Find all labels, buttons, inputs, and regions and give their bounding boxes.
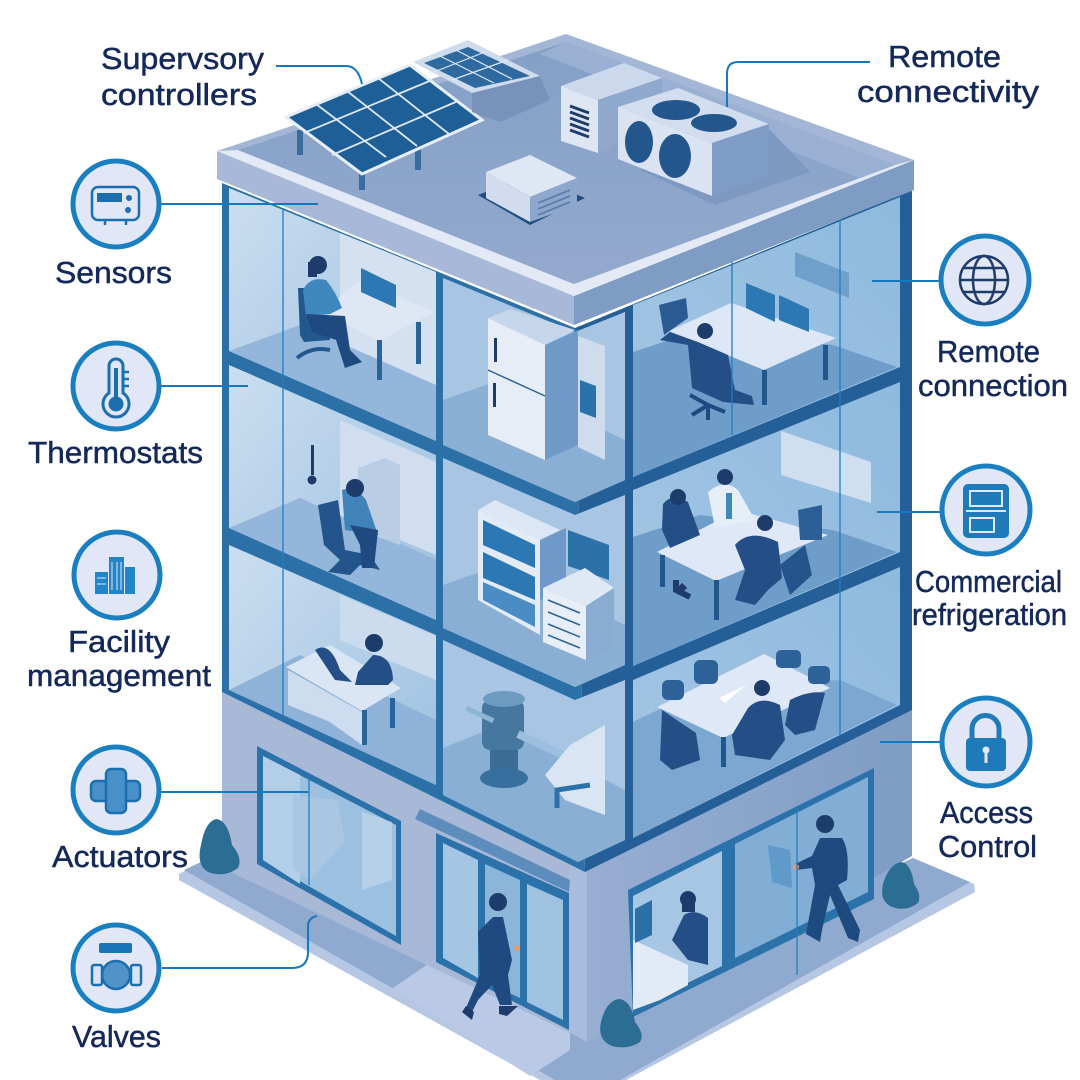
room: lower centre: [443, 640, 625, 862]
room: upper left: [229, 188, 436, 441]
interior: fridge: [488, 309, 605, 460]
facility management callout: Facility: [68, 624, 171, 659]
thermostats callout: [28, 343, 203, 470]
interior: shelves and cabinet: [478, 500, 614, 660]
walking man at entrance: [462, 893, 520, 1020]
label group: remote connectivity: Remote: [888, 39, 1001, 74]
actuators callout: [52, 747, 188, 874]
interior: pump and pipes: [465, 691, 605, 815]
roof rim front edge: left: [217, 150, 574, 296]
icon: refrigeration unit: [963, 484, 1009, 538]
walking man at door: [793, 815, 860, 942]
valves callout: Valves: [72, 1019, 161, 1054]
roof deck: [238, 42, 895, 284]
icon: thermometer: [103, 359, 129, 417]
room: middle left: [229, 365, 436, 620]
actuators callout: Actuators: [52, 839, 188, 874]
interior: man at twin monitors: [659, 252, 849, 420]
ground wall: right: [585, 708, 912, 1042]
parapet: left side: [217, 151, 574, 325]
facility management callout: management: [27, 658, 211, 693]
room: upper right: [633, 197, 900, 477]
room: middle right: [633, 382, 900, 666]
rooftop unit: louvred box: [561, 63, 662, 153]
facility management callout: [27, 532, 211, 693]
interior: left thermometer and seated man: [308, 445, 400, 575]
pavement base: [179, 852, 975, 1080]
glass reflection lines: [283, 208, 840, 975]
ground wall: left: [222, 692, 585, 1040]
right ground windows: [628, 768, 874, 1017]
icon: actuator cross: [91, 769, 140, 813]
sensors callout: Sensors: [55, 255, 172, 290]
building ground floor: [222, 692, 912, 1042]
corner pillar: [569, 865, 587, 1042]
left facade frame: [222, 183, 585, 872]
room: lower right: [633, 567, 900, 838]
commercial refrigeration callout: refrigeration: [912, 597, 1067, 632]
roof rim front edge: right: [574, 160, 914, 296]
connector lines: [160, 62, 942, 968]
right facade frame: [575, 190, 912, 872]
room: upper centre: [443, 278, 625, 502]
rooftop unit: twin fan condenser: [618, 88, 810, 205]
bush: left: [200, 819, 240, 874]
icon: sensor panel: [92, 187, 139, 225]
solar panel: main: [286, 65, 482, 190]
canopy over entrance: [415, 809, 570, 892]
label group: remote connectivity: [857, 39, 1040, 109]
interior: man at lower-left desk: [286, 634, 401, 745]
access control callout: [938, 698, 1037, 864]
left ground window: [257, 746, 401, 945]
icon: buildings: [95, 557, 135, 594]
label group: supervisory controllers: controllers: [101, 77, 257, 112]
access control callout: Access: [940, 795, 1033, 830]
commercial refrigeration callout: Commercial: [915, 564, 1062, 599]
access control callout: Control: [938, 829, 1037, 864]
room: lower left: [229, 545, 436, 785]
roof: [217, 34, 914, 325]
glass facades: [222, 183, 912, 872]
remote connection callout: connection: [918, 368, 1068, 403]
parapet: right side: [574, 160, 914, 325]
interior: man at lower-right table: [657, 650, 830, 770]
sensors callout: [55, 161, 172, 290]
label group: supervisory controllers: Supervsory: [101, 41, 265, 76]
bush: front: [600, 999, 642, 1047]
icon: padlock: [966, 716, 1006, 771]
bush: right: [882, 862, 919, 909]
roof rim rear edges: [217, 34, 914, 296]
label group: remote connectivity: connectivity: [857, 74, 1040, 109]
rooftop unit: low box: [478, 155, 585, 225]
label group: supervisory controllers: [101, 41, 265, 112]
interior: ground-floor wall keypad: [768, 845, 792, 888]
valves callout: [72, 925, 161, 1054]
remote connection callout: Remote: [937, 334, 1040, 369]
remote connection callout: [918, 236, 1068, 403]
thermostats callout: Thermostats: [28, 435, 203, 470]
room: middle centre: [443, 458, 625, 687]
icon: valve: [92, 943, 141, 989]
interior: woman at ground desk: [635, 891, 708, 965]
icon: globe: [960, 256, 1008, 304]
solar panel: rear with unit: [413, 40, 550, 122]
commercial refrigeration callout: [912, 466, 1067, 632]
entrance door: [436, 833, 569, 1030]
interior: woman at desk upper left: [297, 256, 434, 380]
interior: meeting of three: [657, 431, 871, 620]
